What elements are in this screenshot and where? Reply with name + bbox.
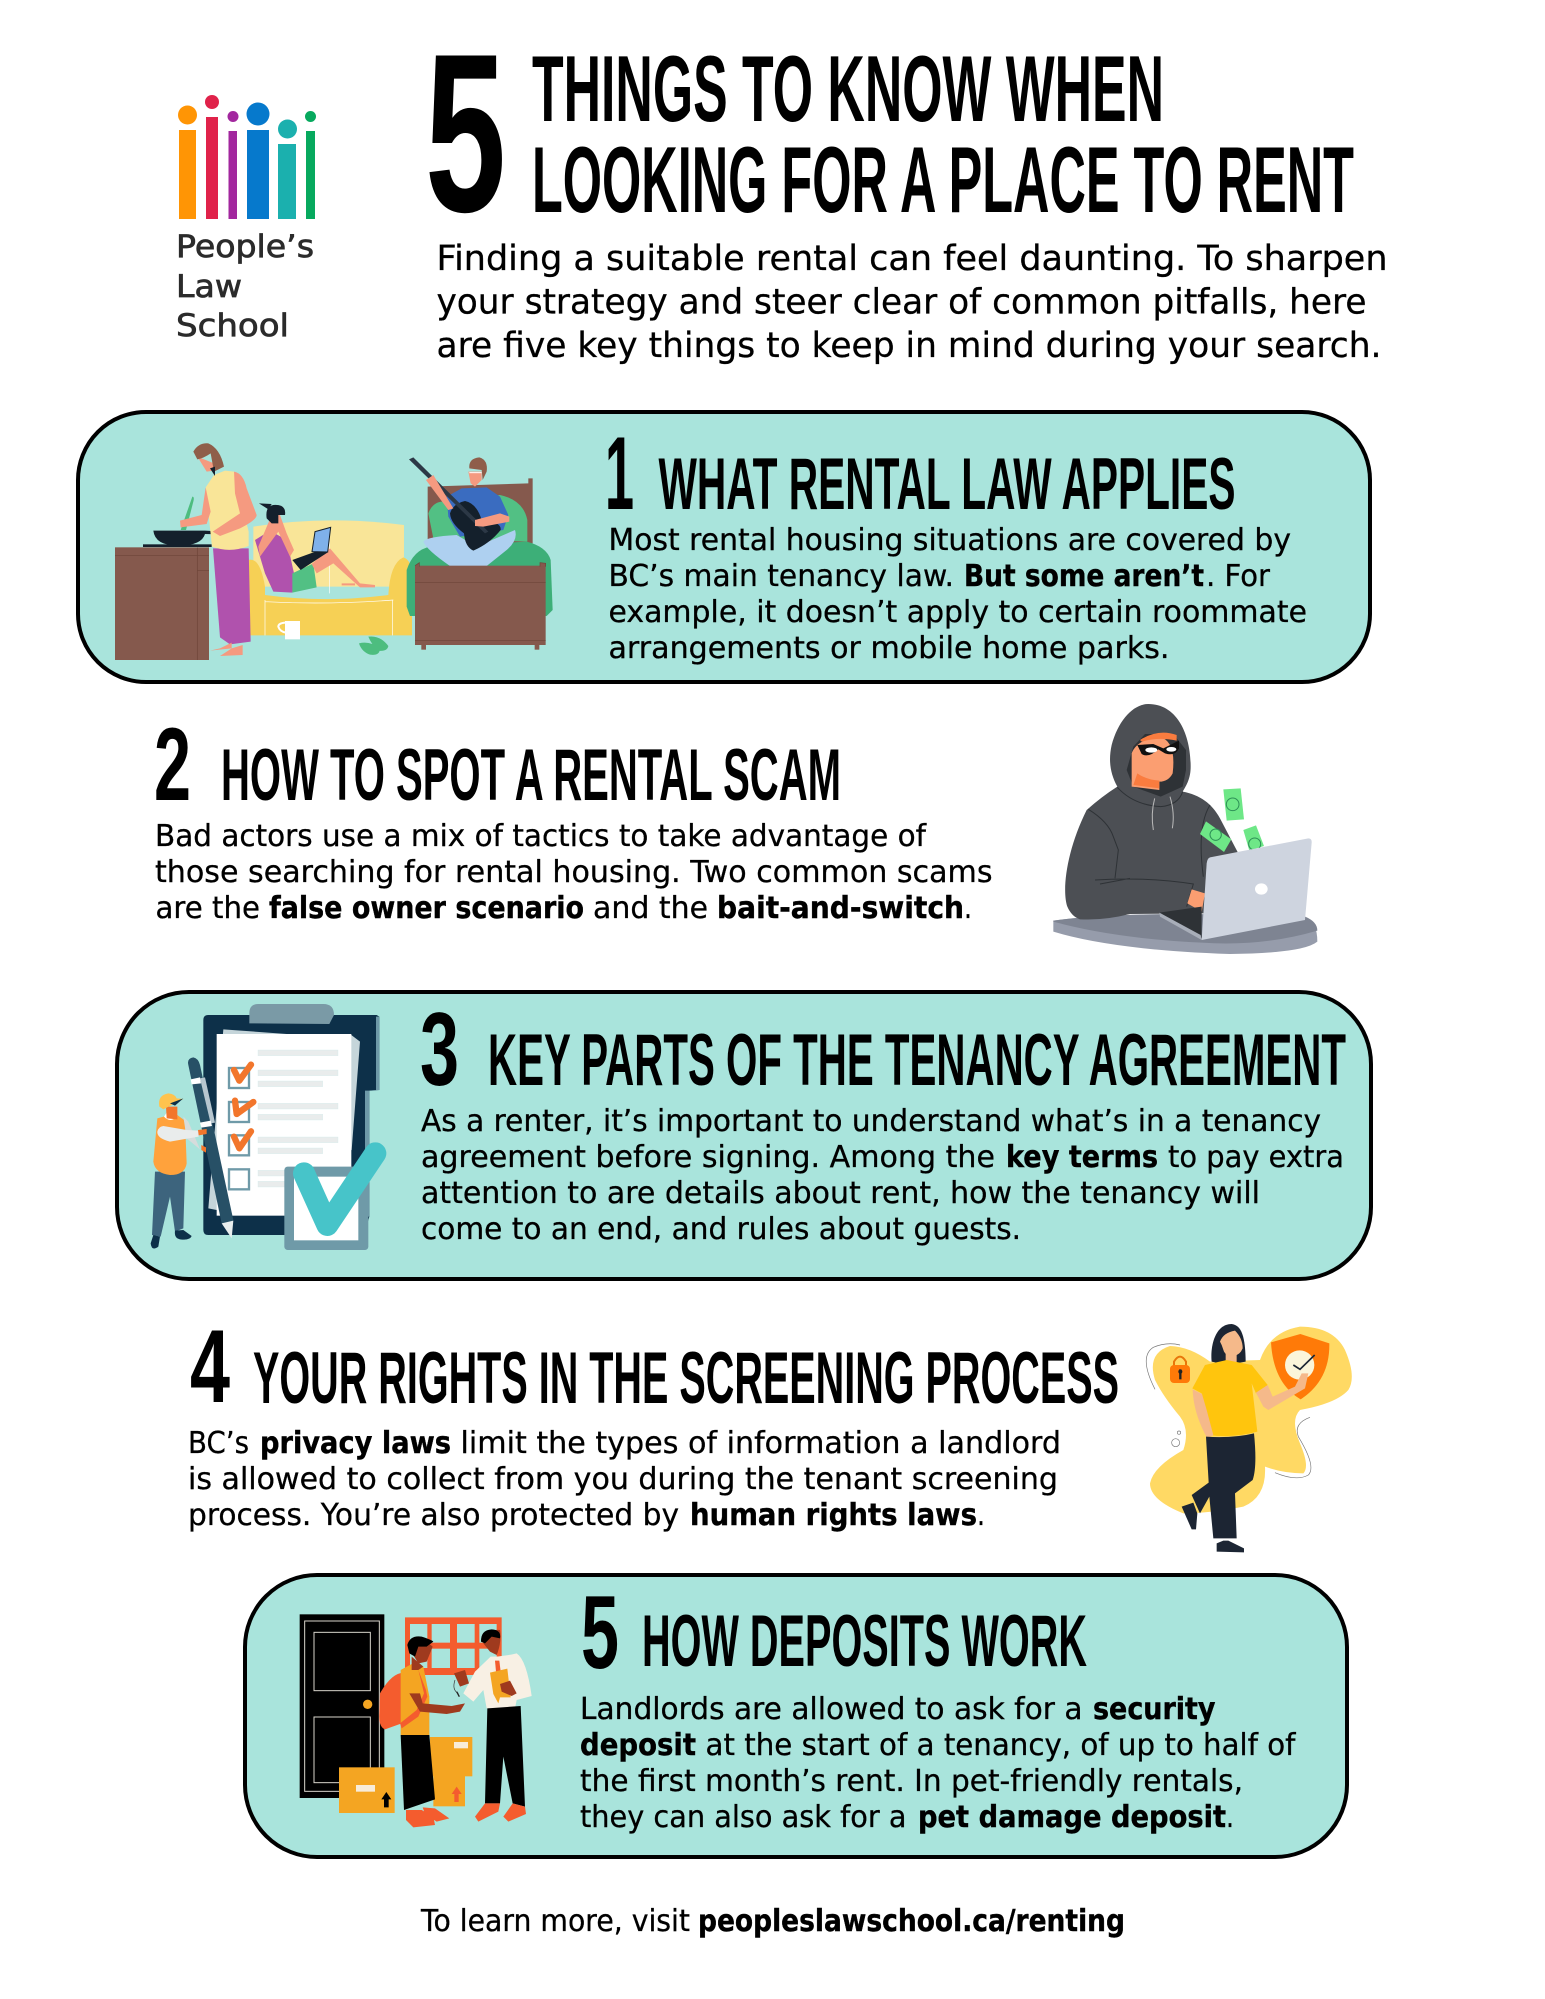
body 3: As a renter, it’s important to understand what’s in a tenancy [421, 1104, 1321, 1139]
body 5: the first month’s rent. In pet-friendly rentals, [580, 1764, 1243, 1799]
body 2: Bad actors use a mix of tactics to take advantage of [155, 819, 927, 854]
panel 5: how deposits work [245, 1575, 1347, 1857]
body 4 [188, 1426, 1061, 1533]
number 5: 5 [581, 1575, 619, 1691]
number 3: 3 [420, 992, 459, 1108]
icon: landlord handing keys to tenant [300, 1614, 532, 1827]
body 2: false owner scenario [269, 891, 584, 926]
number 4: 4 [190, 1309, 230, 1425]
body 5 [580, 1692, 1297, 1835]
body 5: at the start of a tenancy, of up to half of [706, 1728, 1297, 1763]
logo: People's Law School: People’s [176, 229, 314, 265]
body 1: . For [1206, 559, 1271, 594]
body 2: those searching for rental housing. Two common scams [155, 855, 993, 890]
body 4: BC’s [188, 1426, 249, 1461]
number 2: 2 [154, 707, 191, 823]
body 5: they can also ask for a [580, 1800, 906, 1835]
body 4: human rights laws [690, 1498, 977, 1533]
intro text: your strategy and steer clear of common pitfalls, here [436, 282, 1366, 322]
intro text [436, 239, 1388, 366]
body 4: process. You’re also protected by [188, 1498, 679, 1533]
body 2: . [964, 891, 972, 926]
intro text: are five key things to keep in mind during your search. [436, 326, 1382, 366]
body 5: . [1226, 1800, 1234, 1835]
panel 1: what rental law applies [78, 412, 1370, 682]
body 4: limit the types of information a landlord [460, 1426, 1061, 1461]
body 5: pet damage deposit [918, 1800, 1226, 1835]
body 5: deposit [580, 1728, 696, 1763]
body 3: attention to are details about rent, how the tenancy will [421, 1176, 1260, 1211]
logo: People's Law School: Law [176, 269, 242, 305]
body 1: Most rental housing situations are covered by [608, 523, 1291, 558]
icon: hooded scammer at laptop [1053, 704, 1317, 954]
logo: People's Law School: School [176, 308, 289, 344]
title: 5 [425, 6, 506, 259]
title [425, 6, 1354, 259]
body 1: But some aren’t [964, 559, 1204, 594]
section 4: your rights in the screening process [188, 1309, 1352, 1552]
body 3: agreement before signing. Among the [421, 1140, 995, 1175]
footer link text: peopleslawschool.ca/renting [698, 1904, 1125, 1939]
body 3: key terms [1006, 1140, 1158, 1175]
icon: three roommates at home [115, 443, 553, 660]
logo: People's Law School [176, 95, 316, 344]
panel 3: key parts of the tenancy agreement [117, 992, 1371, 1279]
footer link text: To learn more, visit [420, 1904, 690, 1939]
body 4: . [977, 1498, 985, 1533]
body 3: come to an end, and rules about guests. [421, 1212, 1021, 1247]
footer link text [420, 1904, 1125, 1939]
heading 5: HOW DEPOSITS WORK [642, 1601, 1087, 1682]
icon: woman choosing security shield [1146, 1324, 1352, 1552]
body 5: security [1093, 1692, 1216, 1727]
body 2: bait-and-switch [717, 891, 964, 926]
body 1: arrangements or mobile home parks. [608, 631, 1170, 666]
number 1: 1 [605, 416, 634, 532]
body 1: example, it doesn’t apply to certain roommate [608, 595, 1307, 630]
body 2: are the [156, 891, 260, 926]
body 4: is allowed to collect from you during the tenant screening [188, 1462, 1058, 1497]
body 1 [608, 523, 1307, 666]
body 1: BC’s main tenancy law. [608, 559, 954, 594]
intro text: Finding a suitable rental can feel daunting. To sharpen [436, 239, 1388, 279]
icon: clipboard checklist with worker [151, 1004, 379, 1250]
body 4: privacy laws [260, 1426, 451, 1461]
heading 2: HOW TO SPOT A RENTAL SCAM [221, 735, 841, 816]
body 3 [421, 1104, 1344, 1247]
body 2: and the [593, 891, 708, 926]
body 5: Landlords are allowed to ask for a [580, 1692, 1082, 1727]
body 2 [155, 819, 993, 926]
body 3: to pay extra [1168, 1140, 1344, 1175]
section 2: how to spot a rental scam [154, 704, 1317, 954]
